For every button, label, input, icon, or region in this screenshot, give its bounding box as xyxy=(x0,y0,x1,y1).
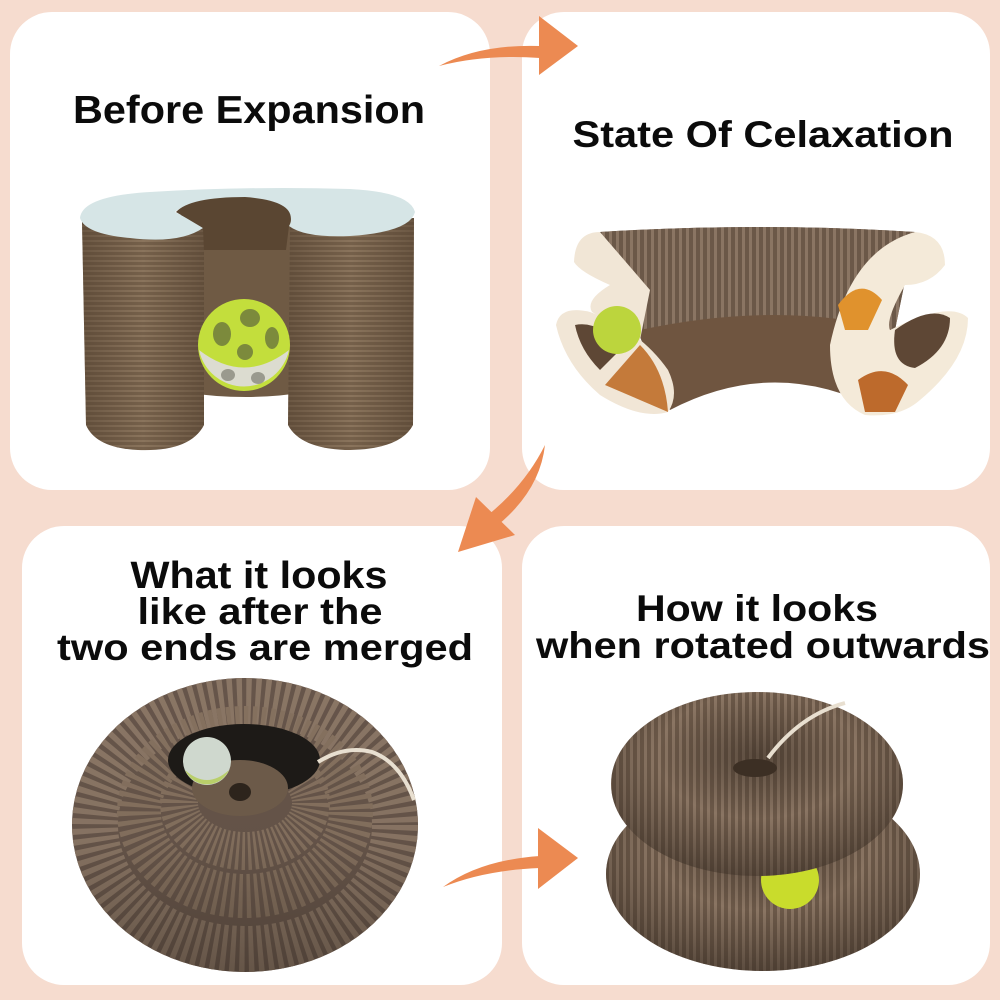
heading: merged ends: like after the xyxy=(138,591,382,632)
panel: before expansion xyxy=(10,12,490,490)
photo: rotated donut xyxy=(606,692,920,971)
heading: merged ends: What it looks xyxy=(130,555,388,597)
panel: merged ends xyxy=(22,526,502,985)
heading: before expansion: Before Expansion xyxy=(73,89,425,132)
arrow: top xyxy=(439,16,578,75)
heading: rotated outwards xyxy=(535,588,990,666)
photo: arched scratcher xyxy=(556,227,968,415)
icon: ball xyxy=(761,851,819,909)
heading: rotated outwards: How it looks xyxy=(636,588,878,629)
heading: merged ends xyxy=(57,555,473,668)
arrow: bottom xyxy=(443,828,578,889)
panel: rotated outwards xyxy=(522,526,990,985)
heading: state of celaxation: State Of Celaxation xyxy=(572,114,954,155)
photo: merged donut xyxy=(72,678,418,972)
icon: ball xyxy=(198,299,290,391)
heading: rotated outwards: when rotated outwards xyxy=(535,625,990,666)
arrow: right down-left xyxy=(458,445,545,552)
panel: state of relaxation xyxy=(522,12,990,490)
icon: ball xyxy=(183,737,231,785)
heading: merged ends: two ends are merged xyxy=(57,627,473,668)
photo: folded scratcher with ball xyxy=(80,188,415,450)
